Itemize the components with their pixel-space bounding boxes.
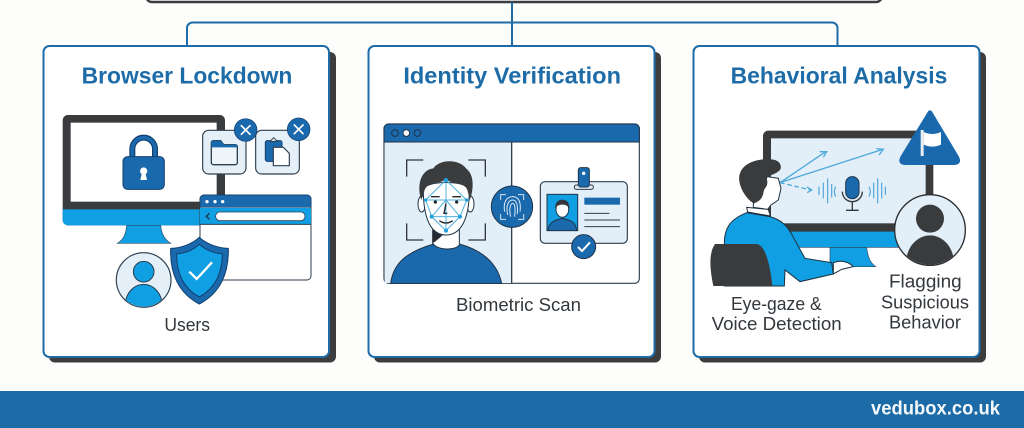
label: Flagging Suspicious Behavior: Behavior [889,311,961,332]
label: Flagging Suspicious Behavior [881,270,969,332]
icon: flagged user avatar [894,194,966,266]
icon: fingerprint [491,186,533,227]
icon: user avatar [116,252,172,308]
figure: person at desk [710,159,853,286]
panel: identity verification [368,46,661,362]
panel: browser lockdown [44,46,336,362]
label: Flagging Suspicious Behavior: Suspicious [881,291,969,312]
heading: Behavioral Analysis: Behavioral Analysis [731,62,947,88]
icon: shield check [171,237,228,304]
label: Eye-gaze & Voice Detection [712,293,842,334]
icon: blocked folder [203,119,257,174]
label: Users: Users [164,314,210,335]
panel: behavioral analysis [694,46,986,362]
top header box [146,0,882,2]
icon: ID card [540,168,627,259]
icon: monitor with lock [63,115,225,243]
label: Biometric Scan: Biometric Scan [456,294,581,315]
icon: microphone with sound waves [819,177,885,210]
browser window frame [384,124,639,283]
footer bar [0,391,1024,428]
face scan portrait [391,160,502,283]
label: Eye-gaze & Voice Detection: Voice Detection [712,313,842,334]
icon: blocked clipboard [256,118,310,174]
footer url: vedubox.co.uk [871,398,1000,420]
heading: Identity Verification: Identity Verification [403,62,621,88]
icon: browser window [200,195,311,280]
label: Flagging Suspicious Behavior: Flagging [889,270,962,291]
monitor with gaze arrows [763,131,933,267]
icon: warning flag triangle [902,113,958,163]
heading: Browser Lockdown: Browser Lockdown [82,62,292,88]
connector lines [187,2,838,46]
label: Eye-gaze & Voice Detection: Eye-gaze & [731,293,822,314]
